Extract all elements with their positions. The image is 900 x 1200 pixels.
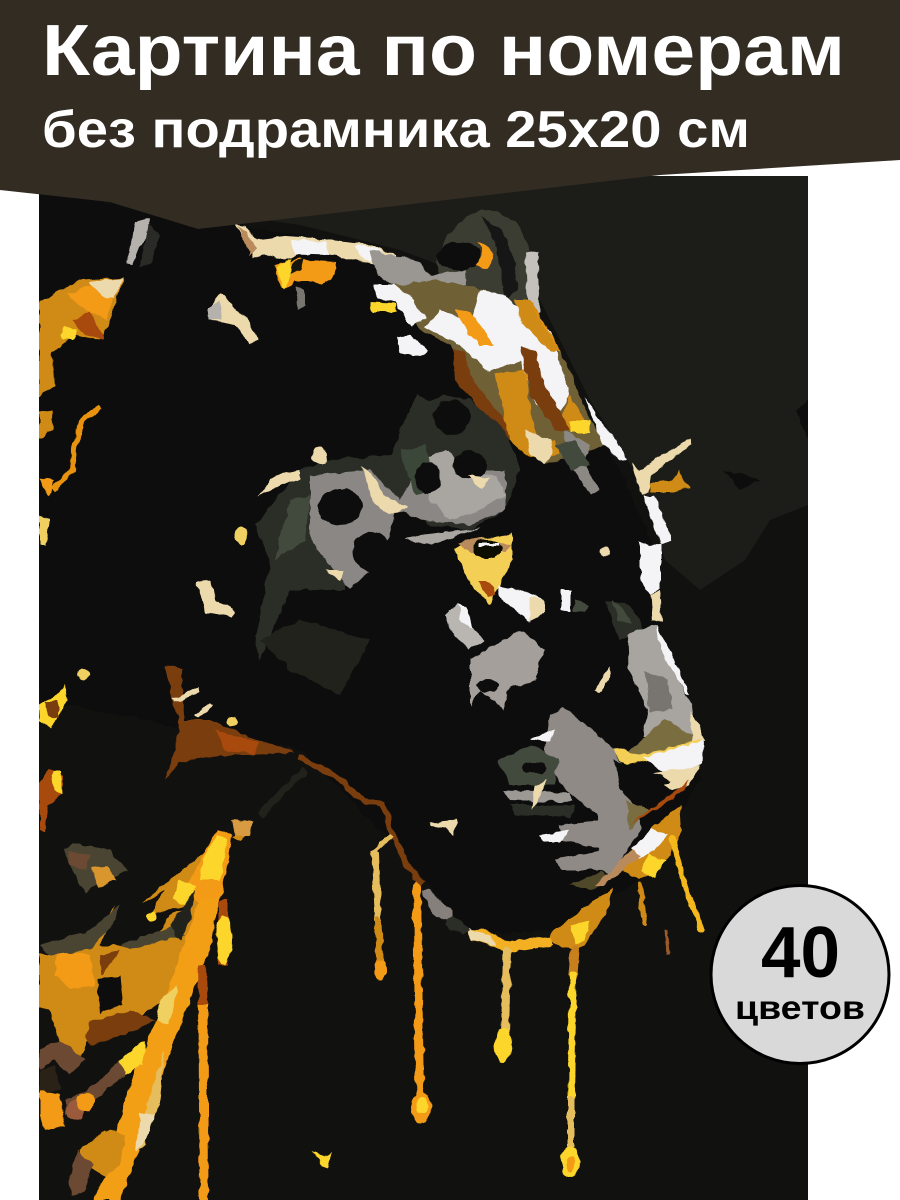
spotted fur on the temple bbox=[255, 370, 520, 695]
jaw line bbox=[422, 888, 613, 952]
subtitle: без подрамника 25х20 см bbox=[42, 101, 750, 159]
whiskers bbox=[632, 438, 692, 545]
fur along the forehead bbox=[128, 218, 466, 310]
eye bbox=[405, 528, 545, 622]
cheek fur bbox=[445, 543, 662, 710]
panel: painting of a panther bbox=[39, 176, 808, 1200]
muzzle bbox=[497, 625, 705, 890]
brown paint shape on the neck bbox=[165, 666, 423, 885]
drip blobs bbox=[312, 818, 579, 1178]
mouth drips bbox=[595, 805, 702, 955]
header banner bbox=[0, 0, 900, 229]
top left orange fur bbox=[39, 278, 123, 545]
badge: 40 colours bbox=[711, 886, 889, 1064]
badge label: цветов bbox=[735, 989, 865, 1026]
golden shoulder bbox=[39, 820, 253, 1200]
cream spots on the head bbox=[197, 293, 258, 617]
ear bbox=[436, 210, 540, 325]
title: Картина по номерам bbox=[42, 11, 845, 91]
left yellow and brown marks bbox=[39, 669, 127, 892]
faint background fur bbox=[725, 400, 808, 490]
panther head silhouette bbox=[275, 640, 370, 746]
fur patch on the top of the head bbox=[370, 280, 628, 495]
badge number: 40 bbox=[761, 913, 840, 993]
background: lighter upper right area bbox=[230, 176, 808, 590]
long paint drips bbox=[375, 855, 575, 1145]
